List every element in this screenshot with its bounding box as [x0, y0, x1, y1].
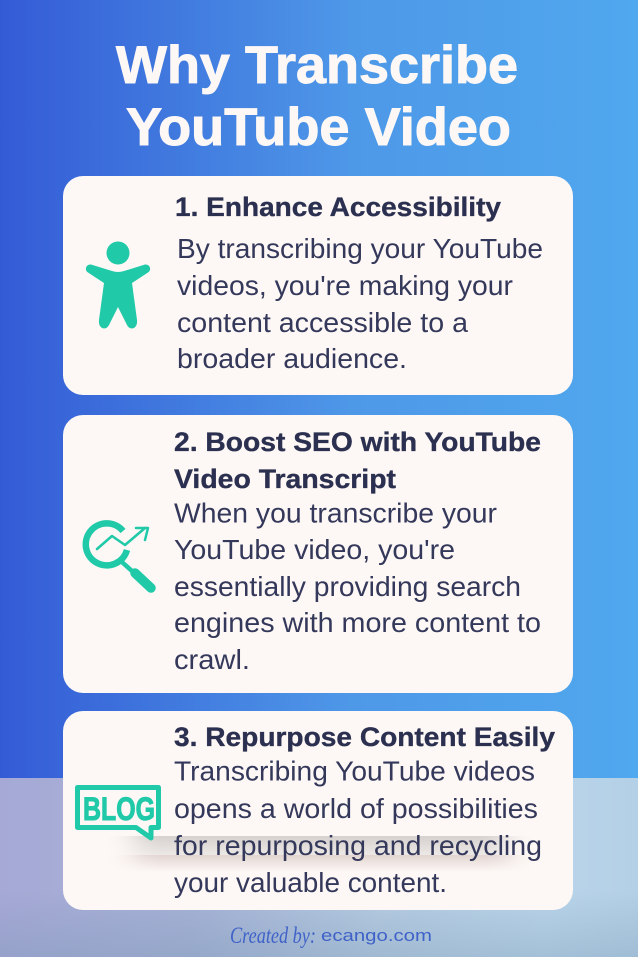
body text 3: opens a world of possibilities — [174, 793, 538, 824]
body text 3: Transcribing YouTube videos — [174, 756, 535, 786]
floor band — [0, 778, 638, 957]
heading 1: 1. Enhance Accessibility — [175, 192, 501, 222]
heading 2: Video Transcript — [174, 464, 396, 494]
heading 3: 3. Repurpose Content Easily — [174, 722, 555, 752]
blurred shadow band — [135, 836, 510, 872]
footer credit — [230, 923, 432, 948]
body text 3: for repurposing and recycling — [174, 830, 542, 861]
panel: boost seo — [63, 415, 573, 693]
heading 2: 2. Boost SEO with YouTube — [174, 427, 541, 457]
icon: blog speech bubble: BLOG — [83, 791, 155, 827]
icon: accessibility person — [86, 242, 150, 328]
body text 2: engines with more content to — [174, 607, 541, 638]
body text 2: When you transcribe your — [174, 498, 497, 528]
title: YouTube Video — [126, 98, 511, 157]
body text 2: essentially providing search — [174, 571, 521, 602]
body text 3: your valuable content. — [174, 867, 447, 898]
body text 2 — [174, 498, 541, 675]
footer credit: ecango.com — [321, 926, 432, 945]
body text 1 — [177, 233, 543, 374]
body text 1: content accessible to a — [177, 307, 469, 338]
footer credit: Created by: — [230, 923, 316, 948]
heading 2 — [174, 427, 541, 494]
body text 1: broader audience. — [177, 343, 407, 374]
panel: repurpose content — [63, 711, 573, 910]
panel: enhance accessibility — [63, 176, 573, 395]
body text 2: crawl. — [174, 644, 250, 675]
icon: magnifier with trend arrow — [86, 523, 151, 588]
body text 2: YouTube video, you're — [174, 534, 455, 565]
title — [116, 36, 518, 157]
body text 1: By transcribing your YouTube — [177, 233, 543, 264]
title: Why Transcribe — [116, 36, 518, 95]
icon: blog speech bubble — [78, 788, 158, 838]
body text 3 — [174, 756, 542, 898]
body text 1: videos, you're making your — [177, 270, 513, 301]
